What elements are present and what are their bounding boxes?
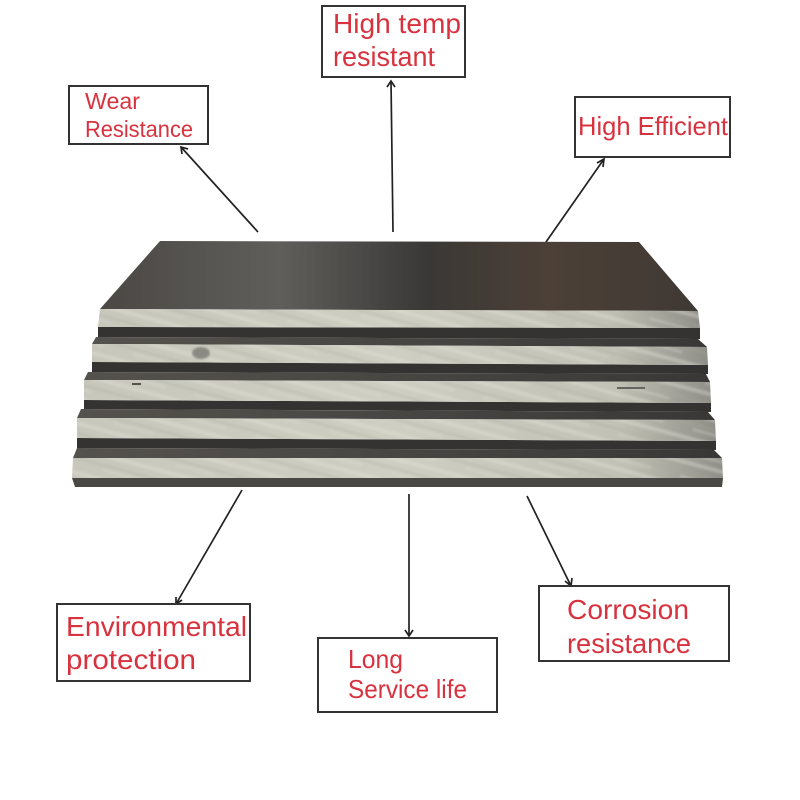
plate 5 [66,448,726,490]
arrow: wear resistance [181,147,258,232]
callout: high efficient: High Efficient [578,111,729,141]
callout: high efficient [575,97,730,157]
callout: high temp resistant: High temp [333,8,461,39]
callout: wear resistance: Resistance [85,116,193,142]
arrow: high temp resistant [387,81,395,232]
plate stack photo [66,241,726,490]
callout: high temp resistant: resistant [333,41,435,72]
top plate surface [100,241,698,311]
plate 1 [98,309,700,339]
callout: corrosion resistance: Corrosion [567,594,689,625]
callout: environmental protection: protection [66,644,196,675]
callout: corrosion resistance [539,586,729,661]
callout: environmental protection [57,604,250,681]
callout: long service life [318,638,497,712]
callout: long service life: Long [348,644,403,674]
callout: environmental protection: Environmental [66,611,247,642]
plate 4 [70,409,720,450]
arrow: high efficient [546,159,604,242]
arrow: long service life [405,494,413,636]
plate 2 [85,335,715,375]
plate 3 [78,372,718,412]
arrow: corrosion resistance [527,496,572,586]
callout: wear resistance [69,86,208,144]
arrow: environmental protection [176,490,242,604]
callout: high temp resistant [322,6,465,77]
callout: wear resistance: Wear [85,88,140,114]
callout: long service life: Service life [348,674,467,704]
callout: corrosion resistance: resistance [567,628,691,659]
